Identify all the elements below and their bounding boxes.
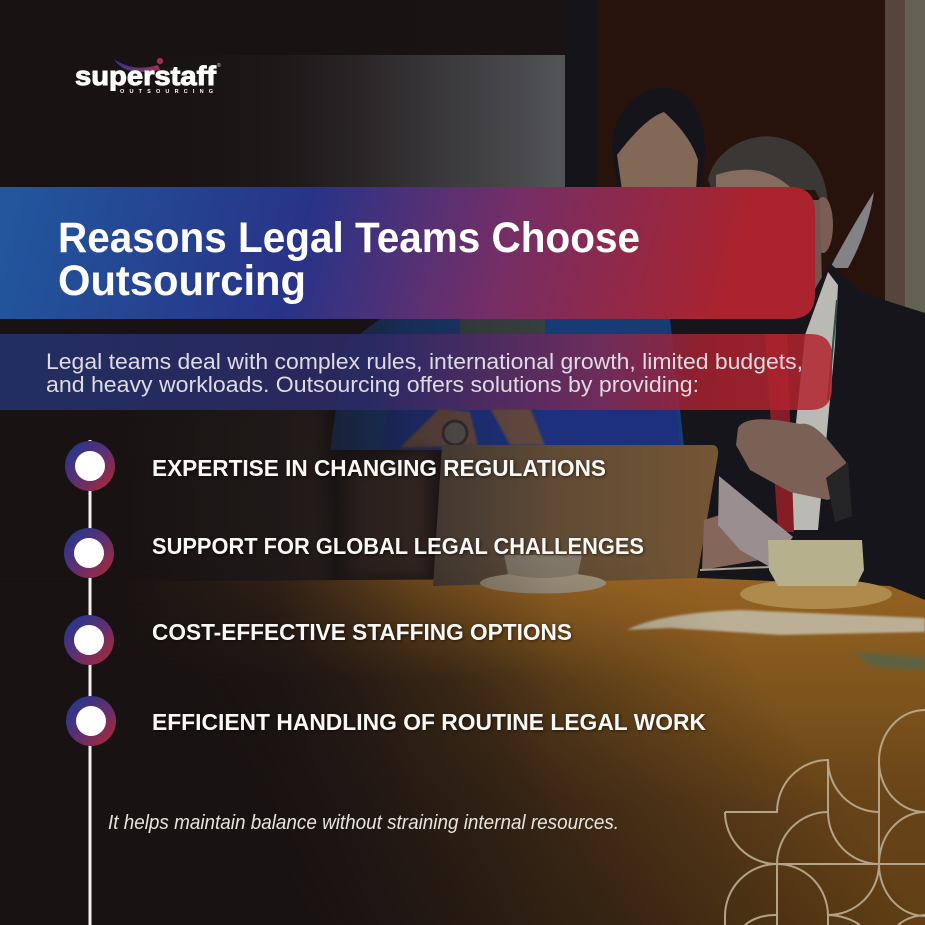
logo: superstaff outsourcing [75, 58, 221, 95]
item 4: EFFICIENT HANDLING OF ROUTINE LEGAL WORK [152, 709, 706, 735]
intro panel [0, 334, 832, 410]
logo wordmark: superstaff [75, 61, 217, 91]
background photo: meeting around a table [186, 0, 925, 925]
decorative line pattern, bottom right [725, 710, 925, 925]
intro text: and heavy workloads. Outsourcing offers solutions by providing: [46, 372, 699, 397]
title text: Outsourcing [58, 257, 306, 305]
logo swoosh [114, 59, 160, 72]
laptop [433, 445, 718, 586]
middle cup [480, 572, 606, 594]
title text: Reasons Legal Teams Choose [58, 214, 640, 262]
closing note: It helps maintain balance without straining internal resources. [108, 812, 619, 834]
title banner [0, 187, 815, 319]
item 3: COST-EFFECTIVE STAFFING OPTIONS [152, 619, 572, 645]
timeline with four points [64, 440, 116, 925]
paper [718, 476, 793, 567]
list items [152, 455, 706, 735]
right cup [740, 579, 892, 609]
timeline node 2 [64, 528, 114, 578]
holding hand [702, 515, 760, 570]
timeline node 4 [66, 696, 116, 746]
woman [612, 88, 705, 190]
item 1: EXPERTISE IN CHANGING REGULATIONS [152, 455, 606, 481]
napkin [627, 610, 925, 635]
table [0, 578, 925, 925]
item 2: SUPPORT FOR GLOBAL LEGAL CHALLENGES [152, 533, 644, 559]
blue scrubs [330, 319, 690, 450]
intro text: Legal teams deal with complex rules, international growth, limited budgets, [46, 349, 803, 374]
logo registered mark: ® [217, 62, 221, 69]
timeline node 1 [65, 441, 115, 491]
timeline node 3 [64, 615, 114, 665]
gesturing hand [736, 419, 846, 500]
logo strapline: OUTSOURCING [120, 89, 213, 95]
man head [708, 136, 828, 215]
man suit [670, 263, 925, 600]
logo dot [157, 58, 163, 64]
